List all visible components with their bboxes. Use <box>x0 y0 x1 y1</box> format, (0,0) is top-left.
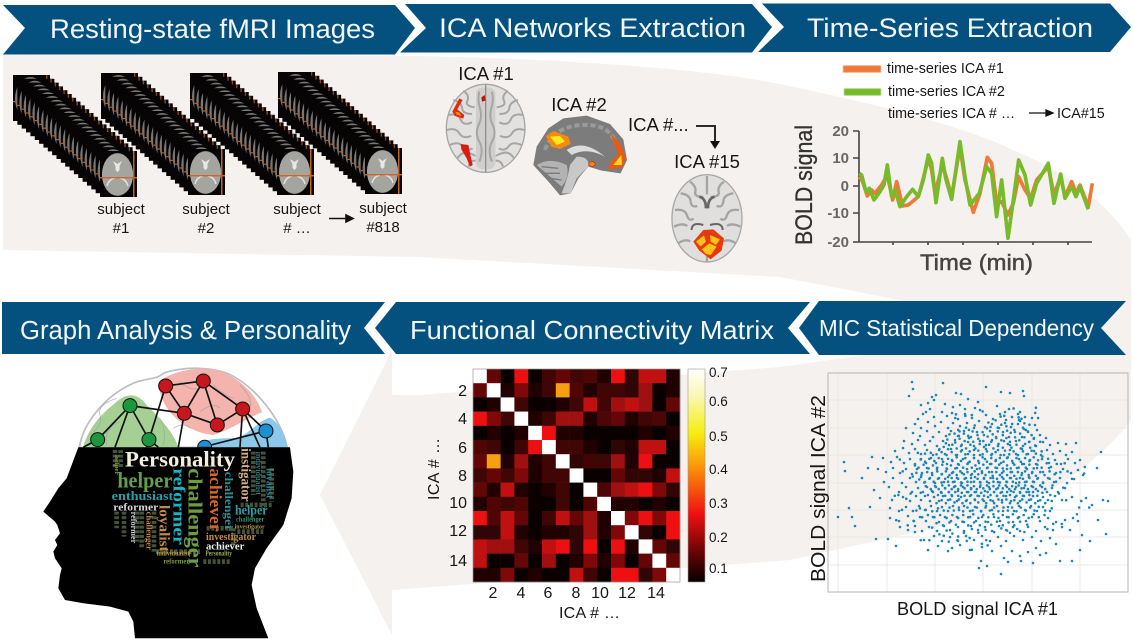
word cloud: individualist <box>254 452 264 495</box>
word cloud: challenger <box>145 512 154 550</box>
line: time-series ICA 2 <box>859 142 1088 238</box>
word cloud: investigator <box>206 532 257 543</box>
word cloud: achiever <box>206 541 245 552</box>
y tick labels: 14 <box>449 553 467 570</box>
label subject 2: #2 <box>198 220 214 237</box>
y axis tick labels: 10 <box>832 150 849 167</box>
word cloud: reformer <box>129 512 138 544</box>
word cloud: loyalist <box>264 468 275 499</box>
brain ICA 2 <box>533 116 627 195</box>
x axis title: ICA # … <box>559 605 620 622</box>
word cloud: challenger <box>183 468 205 568</box>
brain gyri <box>90 382 251 445</box>
word cloud: investigator <box>235 523 265 530</box>
pink brain region <box>159 369 262 435</box>
header: Resting-state fMRI Images <box>3 5 415 54</box>
y axis title: BOLD signal ICA #2 <box>807 395 830 582</box>
y axis label BOLD signal: BOLD signal <box>791 125 818 245</box>
word cloud: Personality <box>125 447 235 472</box>
colour bar <box>688 369 705 582</box>
word cloud: reformer <box>163 557 190 566</box>
colour bar labels: 0.3 <box>709 496 728 511</box>
legend time-series ICA 2: time-series ICA #2 <box>888 84 1005 100</box>
word cloud: enthusiast <box>112 489 174 503</box>
arrow to subject 818 <box>329 215 353 222</box>
header: ICA Networks Extraction <box>400 4 772 52</box>
legend time-series range: ICA#15 <box>1057 106 1105 122</box>
y axis title: ICA # … <box>426 438 443 500</box>
x axis title: BOLD signal ICA #1 <box>897 599 1058 619</box>
header: MIC Statistical Dependency <box>799 301 1126 355</box>
chart axes <box>853 131 1092 245</box>
head silhouette <box>43 447 293 638</box>
y tick labels: 12 <box>449 523 467 540</box>
x tick labels: 10 <box>591 585 609 602</box>
header: Graph Analysis and Personality: Graph Analysis & Personality <box>20 317 351 345</box>
label subject ellipsis: # … <box>283 220 311 237</box>
heatmap cells <box>473 369 680 582</box>
green brain region <box>83 395 178 447</box>
word cloud: challenger <box>236 515 265 524</box>
y tick labels: 10 <box>449 495 467 512</box>
y tick labels: 6 <box>458 440 467 457</box>
legend time-series range: time-series ICA # … <box>888 106 1015 122</box>
header: Functional Connectivity Matrix: Functional Connectivity Matrix <box>410 315 774 345</box>
word cloud: Personality <box>205 550 232 558</box>
panel: ICA networks <box>446 63 742 262</box>
fMRI stack subject 818 <box>278 72 402 194</box>
panel: connectivity matrix <box>426 365 728 622</box>
y axis tick labels: -10 <box>827 205 849 222</box>
label ICA 2: ICA #2 <box>551 94 607 115</box>
x tick labels: 6 <box>544 585 553 602</box>
colour bar labels: 0.7 <box>709 365 728 380</box>
brain ICA 15 <box>672 175 742 262</box>
label subject 818: subject <box>359 200 408 217</box>
label subject 2: subject <box>182 201 231 218</box>
header: Time-Series Extraction: Time-Series Extraction <box>807 13 1093 43</box>
network nodes red <box>159 374 250 432</box>
y tick labels: 4 <box>458 411 467 428</box>
header: Resting-state fMRI Images: Resting-state fMRI Images <box>50 14 375 44</box>
panel: MIC scatter plot <box>807 373 1128 619</box>
word cloud: achiever <box>206 468 225 532</box>
y axis tick labels: 20 <box>832 123 849 140</box>
y axis tick labels: 0 <box>841 178 849 195</box>
legend time-series ICA 1: time-series ICA #1 <box>887 61 1004 77</box>
fMRI stack subject 1 <box>13 75 137 197</box>
header: ICA Networks Extraction: ICA Networks Extraction <box>439 13 746 43</box>
colour bar labels: 0.5 <box>709 429 728 444</box>
panel: fMRI image stacks <box>13 72 408 237</box>
word cloud: helper <box>113 455 120 475</box>
word cloud: challenger <box>222 472 236 532</box>
blue brain region <box>197 418 287 447</box>
label subject 1: subject <box>97 201 146 218</box>
panel: head with brain network and personality word cloud <box>43 368 293 638</box>
line: time-series ICA 1 <box>859 147 1092 215</box>
scatter frame and grid <box>828 373 1128 592</box>
colour bar labels: 0.2 <box>709 530 728 545</box>
elbow arrow to ICA 15 <box>696 126 720 149</box>
word cloud: individualist <box>157 550 190 558</box>
network nodes green <box>91 399 156 447</box>
label ICA 1: ICA #1 <box>458 63 514 84</box>
x axis label Time (min): Time (min) <box>920 250 1033 275</box>
header: Functional Connectivity Matrix <box>375 302 810 354</box>
scatter points <box>838 382 1108 574</box>
word cloud: reformer <box>113 502 159 513</box>
y tick labels: 8 <box>458 468 467 485</box>
colour bar labels: 0.1 <box>709 561 728 576</box>
fMRI stack subject 3 <box>190 73 314 195</box>
brain outline <box>79 368 287 447</box>
colour bar labels: 0.4 <box>709 462 728 477</box>
label subject 1: #1 <box>113 220 129 237</box>
word cloud: loyalist <box>155 505 171 552</box>
x tick labels: 12 <box>618 585 636 602</box>
matrix frame <box>473 369 680 582</box>
colour bar labels: 0.6 <box>709 394 728 409</box>
header: Graph Analysis and Personality <box>2 302 385 354</box>
network nodes blue <box>198 424 273 447</box>
word cloud: helper <box>117 467 172 492</box>
y tick labels: 2 <box>458 383 467 400</box>
x tick labels: 14 <box>647 585 665 602</box>
panel: time-series chart <box>791 61 1105 275</box>
x tick labels: 8 <box>572 585 581 602</box>
label subject 818: #818 <box>366 219 400 236</box>
y axis tick labels <box>827 123 849 251</box>
y axis tick labels: -20 <box>827 234 849 251</box>
word cloud: instigator <box>238 448 253 502</box>
network edges <box>83 381 268 447</box>
word cloud: helper <box>235 503 268 518</box>
x tick labels: 2 <box>489 585 498 602</box>
header: Time-Series Extraction <box>758 4 1131 52</box>
legend time-series range <box>888 106 1105 122</box>
brain ICA 1 <box>446 84 525 172</box>
header: MIC Statistical Dependency: MIC Statistical Dependency <box>819 315 1094 341</box>
label ICA 15: ICA #15 <box>674 151 740 172</box>
fMRI stack subject 2 <box>101 73 225 195</box>
label subject ellipsis: subject <box>273 201 322 218</box>
colour bar labels <box>709 365 728 576</box>
label ICA ellipsis: ICA #... <box>628 114 689 135</box>
x tick labels <box>489 585 665 602</box>
word cloud <box>112 447 275 568</box>
word cloud: reformer <box>169 468 188 546</box>
y tick labels <box>449 383 467 570</box>
x tick labels: 4 <box>517 585 526 602</box>
